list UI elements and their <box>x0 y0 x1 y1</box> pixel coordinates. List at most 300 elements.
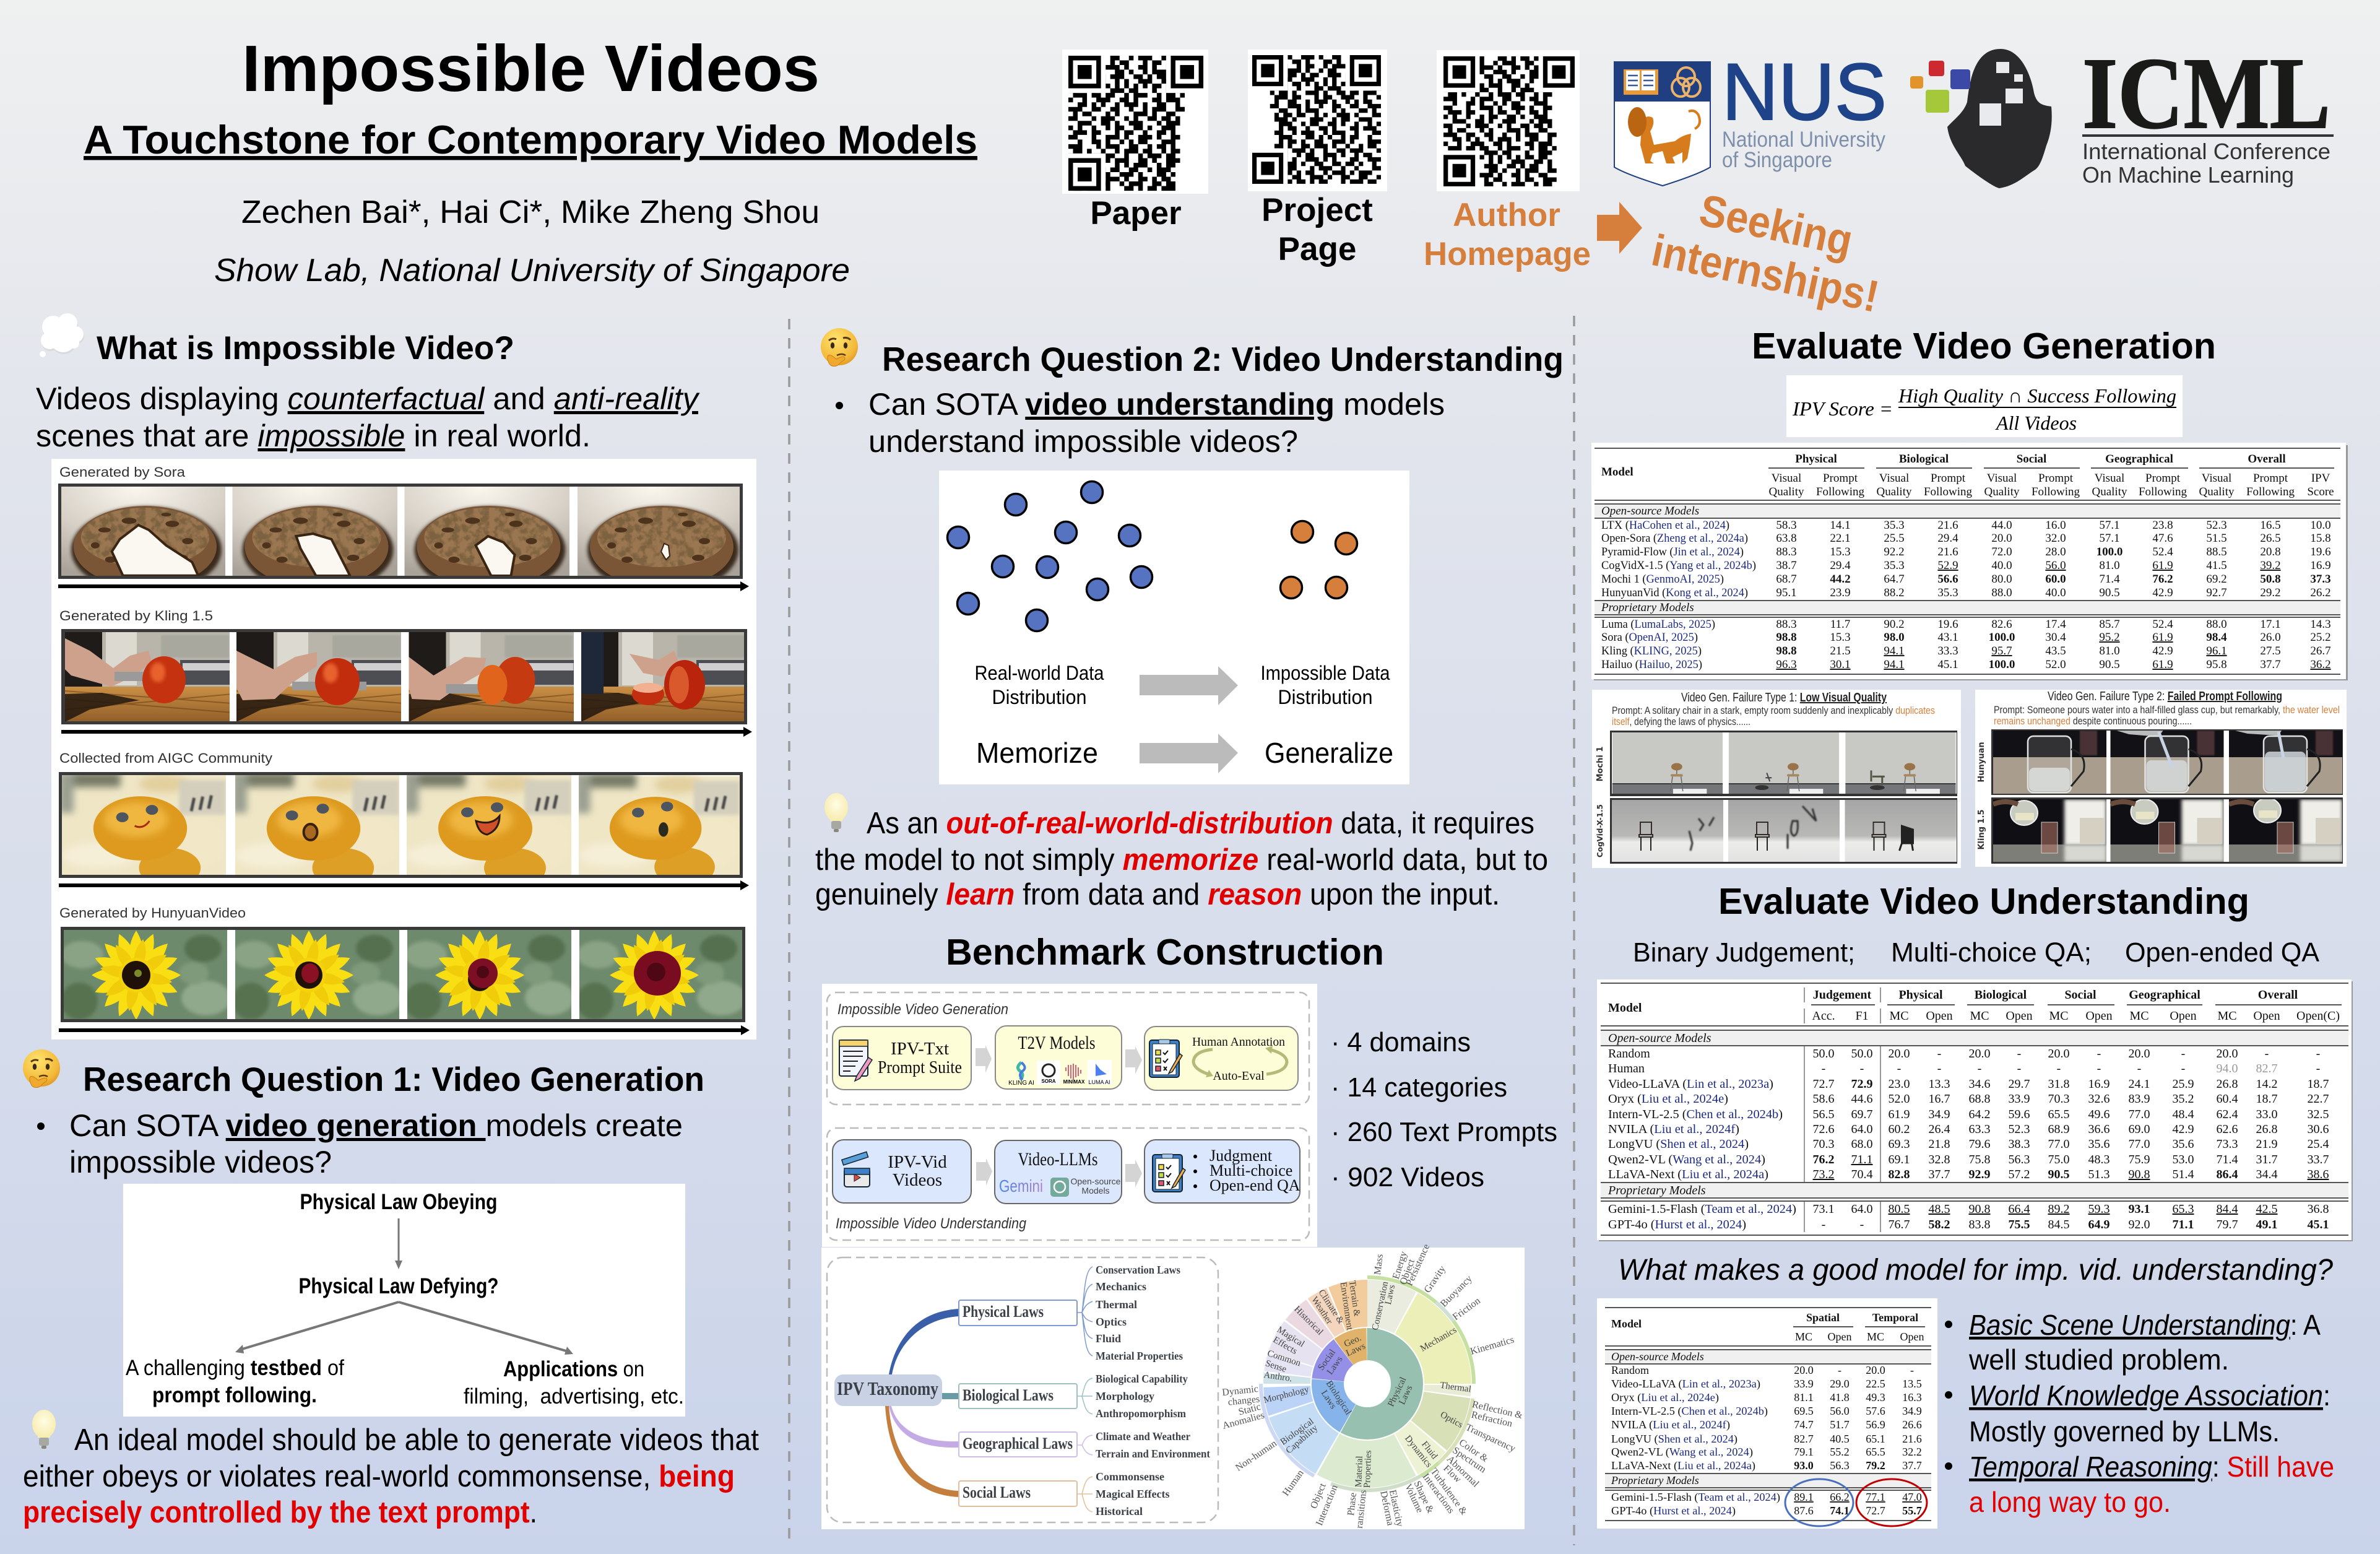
QR code: project page <box>1248 50 1387 191</box>
table header: Following <box>2032 485 2080 498</box>
outer labels: Object <box>1309 1482 1328 1510</box>
branch: social laws <box>959 1470 1169 1517</box>
proprietary rows: 49.1 <box>2256 1218 2278 1231</box>
open-source rows: 38.7 <box>1776 559 1797 572</box>
proprietary rows: Proprietary Models <box>1608 1184 1706 1197</box>
open-source rows: 62.4 <box>2216 1108 2238 1121</box>
frames: CogVid-X chair <box>1610 798 1957 864</box>
open-source rows: 26.2 <box>2310 586 2331 599</box>
domain / category statistics: · 260 Text Prompts <box>1331 1117 1557 1147</box>
RQ2 insight text: genuinely learn from data and reason upon the input. <box>815 878 1500 911</box>
outer labels: Spectrum <box>1450 1445 1488 1475</box>
outer labels: Friction <box>1451 1296 1482 1322</box>
open-source rows: 20.0 <box>1968 1047 1991 1061</box>
arrow <box>1125 1160 1142 1187</box>
outer labels: Static <box>1237 1402 1262 1418</box>
open-source rows: 39.2 <box>2260 559 2281 572</box>
panel: failure type 2 failed prompt following: Kling 1.5 <box>1977 809 1986 850</box>
open-source rows: 16.9 <box>2088 1077 2110 1091</box>
logo: ICML head <box>1910 49 2052 188</box>
proprietary rows: 45.1 <box>2308 1218 2329 1231</box>
open-source rows: Mochi 1 (GenmoAI, 2025) <box>1601 573 1724 586</box>
panel: memorize vs generalize diagram: Distribution <box>1278 686 1373 708</box>
table header: Visual <box>1879 472 1909 485</box>
proprietary rows <box>1608 1184 2329 1231</box>
step: T2V models: MINIMAX <box>1063 1079 1085 1085</box>
table rules <box>1595 448 2340 674</box>
proprietary rows: 95.8 <box>2206 658 2227 671</box>
proprietary rows: 15.3 <box>1830 631 1851 644</box>
label: author homepage: Homepage <box>1424 236 1591 272</box>
category labels: Weather <box>1309 1295 1335 1326</box>
open-source rows: LLaVA-Next (Liu et al., 2024a) <box>1608 1168 1768 1181</box>
open-source rows: 58.6 <box>1812 1092 1835 1106</box>
open-source rows: Qwen2-VL (Wang et al., 2024) <box>1608 1153 1765 1166</box>
open-source rows <box>1608 1031 2329 1181</box>
step: IPV-Txt prompt suite <box>833 1027 971 1090</box>
step: judgment, multi-choice, open-end QA: Judgment <box>1209 1147 1273 1165</box>
open-source rows: 68.8 <box>1968 1092 1991 1106</box>
label: author homepage <box>1424 197 1591 272</box>
panel: memorize vs generalize diagram: Real-world Data <box>974 662 1104 684</box>
proprietary rows: 92.0 <box>2128 1218 2150 1231</box>
takeaways list: World Knowledge Association: <box>1969 1379 2330 1412</box>
proprietary rows: 73.1 <box>1812 1202 1835 1216</box>
logo: NUS crest <box>1614 62 1710 186</box>
table rows: Proprietary Models <box>1611 1474 1699 1487</box>
table header <box>1611 1311 1924 1343</box>
open-source rows: 59.6 <box>2008 1108 2030 1121</box>
open-source rows: 23.8 <box>2152 519 2173 532</box>
category labels: Laws <box>1397 1384 1415 1406</box>
proprietary rows: 96.3 <box>1776 658 1797 671</box>
proprietary rows: 61.9 <box>2152 658 2173 671</box>
table header: Biological <box>1975 988 2027 1002</box>
open-source rows: 21.6 <box>1937 545 1958 558</box>
table rows: 56.3 <box>1830 1459 1850 1472</box>
open-source rows: 35.2 <box>2173 1092 2194 1106</box>
outer labels: Energy <box>1391 1250 1409 1280</box>
open-source rows: 15.8 <box>2310 532 2331 545</box>
open-source rows: 37.3 <box>2310 573 2331 586</box>
table header: Open <box>2170 1009 2197 1023</box>
proprietary rows: 80.5 <box>1888 1202 1910 1216</box>
table rows: 40.5 <box>1830 1433 1850 1445</box>
table header: Prompt <box>1823 472 1858 485</box>
open-source rows: 50.0 <box>1851 1047 1873 1061</box>
open-source rows: 69.0 <box>2128 1122 2150 1136</box>
panel: physical law decision diagram: filming, advertising, etc. <box>464 1384 684 1409</box>
proprietary rows: 61.9 <box>2152 631 2173 644</box>
branch: geographical laws: Climate and Weather <box>1096 1430 1190 1443</box>
open-source rows: 20.0 <box>2216 1047 2238 1061</box>
table header: MC <box>1795 1330 1812 1343</box>
open-source rows: 16.7 <box>1929 1092 1950 1106</box>
open-source rows: 52.0 <box>1888 1092 1910 1106</box>
open-source rows: 92.9 <box>1968 1168 1991 1181</box>
table header: MC <box>1889 1009 1909 1023</box>
open-source rows: 26.5 <box>2260 532 2281 545</box>
branch: social laws: Historical <box>1096 1505 1143 1517</box>
proprietary rows: 89.2 <box>2048 1202 2070 1216</box>
open-source rows: 28.0 <box>2045 545 2066 558</box>
open-source rows: 19.6 <box>2310 545 2331 558</box>
open-source rows: 71.4 <box>2216 1153 2238 1166</box>
proprietary rows: - <box>1822 1218 1825 1231</box>
table header: Model <box>1611 1317 1642 1330</box>
outer labels: Refraction <box>1470 1410 1513 1429</box>
open-source rows: 94.0 <box>2216 1062 2238 1075</box>
open-source rows: 35.6 <box>2088 1137 2110 1151</box>
open-source rows: 35.3 <box>1884 559 1905 572</box>
table header: Quality <box>1769 485 1804 498</box>
step: T2V models: T2V Models <box>1018 1033 1096 1053</box>
open-source rows: LTX (HaCohen et al., 2024) <box>1601 519 1729 532</box>
proprietary rows: 66.4 <box>2008 1202 2030 1216</box>
table rows: Intern-VL-2.5 (Chen et al., 2024b) <box>1611 1405 1768 1418</box>
panel: benchmark pipelines: Impossible Video Understanding <box>836 1215 1027 1232</box>
table header: Quality <box>2199 485 2235 498</box>
category labels: Morphology <box>1263 1384 1310 1405</box>
open-source rows: 51.5 <box>2206 532 2227 545</box>
open-source rows: 68.7 <box>1776 573 1797 586</box>
RQ1 question bullet <box>37 1108 683 1179</box>
step: annotation and auto-eval <box>1145 1027 1298 1090</box>
proprietary rows: 90.8 <box>1968 1202 1991 1216</box>
open-source rows: - <box>2265 1047 2269 1061</box>
open-source rows: 68.9 <box>2048 1122 2070 1136</box>
open-source rows: - <box>2017 1047 2021 1061</box>
open-source rows: 72.7 <box>1812 1077 1835 1091</box>
proprietary rows <box>1601 601 2331 671</box>
table rows: 66.2 <box>1830 1491 1850 1503</box>
RQ2 insight text: As an out-of-real-world-distribution data, it requires <box>867 807 1534 840</box>
open-source rows: 76.2 <box>2152 573 2173 586</box>
open-source rows: 18.7 <box>2256 1092 2278 1106</box>
table rows: GPT-4o (Hurst et al., 2024) <box>1611 1504 1736 1517</box>
open-source rows: 88.2 <box>1884 586 1905 599</box>
RQ2 question bullet: understand impossible videos? <box>868 424 1298 459</box>
panel: failure type 1 low visual quality: Mochi 1 <box>1596 747 1605 781</box>
open-source rows: 60.0 <box>2045 573 2066 586</box>
open-source rows: 75.9 <box>2128 1153 2150 1166</box>
table rows: 72.7 <box>1866 1504 1885 1517</box>
open-source rows: - <box>2097 1047 2101 1061</box>
definition text: Videos displaying counterfactual and anti-reality <box>36 381 700 416</box>
logo text: ICML: International Conference <box>2082 139 2330 164</box>
open-source rows: - <box>1937 1062 1941 1075</box>
category labels: Fluid <box>1419 1439 1440 1461</box>
proprietary rows: 95.2 <box>2099 631 2120 644</box>
open-source rows: 60.4 <box>2216 1092 2238 1106</box>
proprietary rows: 83.8 <box>1968 1218 1991 1231</box>
outer labels: ransitions <box>1354 1490 1369 1529</box>
table rows: NVILA (Liu et al., 2024f) <box>1611 1418 1730 1431</box>
open-source rows: HunyuanVid (Kong et al., 2024) <box>1601 586 1748 599</box>
open-source rows: 24.1 <box>2128 1077 2150 1091</box>
outer labels: Flow <box>1441 1463 1463 1485</box>
logo text: ICML: On Machine Learning <box>2082 162 2294 188</box>
category labels: Terrain & <box>1347 1280 1362 1317</box>
table header: Overall <box>2258 988 2298 1002</box>
open-source rows: 64.0 <box>1851 1122 1873 1136</box>
open-source rows: - <box>2316 1062 2320 1075</box>
panel: physical law decision diagram: A challenging testbed of <box>126 1356 344 1380</box>
arrow <box>976 1158 992 1186</box>
formula: IPV score: All Videos <box>1995 412 2077 434</box>
proprietary rows: 71.1 <box>2173 1218 2194 1231</box>
branch: physical laws <box>959 1264 1183 1362</box>
table rows: Open-source Models <box>1611 1350 1704 1363</box>
heading: research question 1: Research Question 1: Video Generation <box>83 1060 704 1098</box>
root node <box>834 1374 942 1406</box>
table rows: 65.1 <box>1866 1433 1885 1445</box>
open-source rows: Video-LLaVA (Lin et al., 2023a) <box>1608 1077 1773 1091</box>
open-source rows: 58.3 <box>1776 519 1797 532</box>
heading: evaluate video generation: Evaluate Video Generation <box>1752 326 2216 367</box>
panel: physical law decision diagram: prompt following. <box>152 1383 317 1407</box>
table: spatial vs temporal results <box>1597 1298 1937 1529</box>
open-source rows: 72.6 <box>1812 1122 1835 1136</box>
open-source rows: 86.4 <box>2216 1168 2238 1181</box>
proprietary rows: 81.0 <box>2099 645 2120 658</box>
category labels: Capability <box>1284 1423 1320 1456</box>
proprietary rows: 98.8 <box>1776 631 1797 644</box>
open-source rows: 22.7 <box>2308 1092 2329 1106</box>
table header: Prompt <box>2145 472 2181 485</box>
open-source rows: 82.7 <box>2256 1062 2278 1075</box>
open-source rows: 48.3 <box>2088 1153 2110 1166</box>
open-source rows: 34.9 <box>1929 1108 1950 1121</box>
open-source rows: 77.0 <box>2048 1137 2070 1151</box>
proprietary rows: 43.1 <box>1937 631 1958 644</box>
panel: failure type 2 failed prompt following: remains unchanged despite continuous pouring...... <box>1994 715 2192 727</box>
branch: geographical laws <box>959 1430 1210 1460</box>
open-source rows: 52.9 <box>1937 559 1958 572</box>
table header: Model <box>1601 466 1634 479</box>
open-source rows: 21.9 <box>2256 1137 2278 1151</box>
proprietary rows: 75.5 <box>2008 1218 2030 1231</box>
impossible data points <box>1280 521 1357 598</box>
branch: biological laws <box>959 1373 1188 1420</box>
table rows: 29.0 <box>1830 1378 1850 1390</box>
open-source rows: 26.8 <box>2256 1122 2278 1136</box>
table header: F1 <box>1855 1009 1869 1023</box>
proprietary rows: 42.5 <box>2256 1202 2278 1216</box>
table rows: 74.1 <box>1830 1504 1850 1517</box>
proprietary rows: Sora (OpenAI, 2025) <box>1601 631 1698 644</box>
category labels: Conservation <box>1370 1280 1390 1331</box>
open-source rows: 88.3 <box>1776 545 1797 558</box>
title: Impossible Videos <box>242 32 820 105</box>
table header: MC <box>1867 1330 1884 1343</box>
outer labels: Color & <box>1457 1437 1491 1464</box>
open-source rows: Open-source Models <box>1601 505 1699 518</box>
open-source rows <box>1601 505 2331 599</box>
table rows: 56.9 <box>1866 1418 1885 1431</box>
table rows: Oryx (Liu et al., 2024e) <box>1611 1391 1719 1404</box>
step: T2V models: LUMA AI <box>1088 1079 1110 1085</box>
category labels: Magical <box>1275 1325 1306 1349</box>
open-source rows: Pyramid-Flow (Jin et al., 2024) <box>1601 545 1744 558</box>
table rows: 32.2 <box>1902 1446 1922 1458</box>
open-source rows: 56.3 <box>2008 1153 2030 1166</box>
branch: social laws: Social Laws <box>963 1483 1031 1501</box>
table rules <box>1605 1308 1931 1521</box>
open-source rows: 20.0 <box>2128 1047 2150 1061</box>
step: IPV-Vid videos: Videos <box>893 1170 942 1190</box>
proprietary rows: 94.1 <box>1884 658 1905 671</box>
proprietary rows: 88.0 <box>2206 618 2227 631</box>
proprietary rows: 100.0 <box>1989 631 2015 644</box>
open-source rows: 35.3 <box>1937 586 1958 599</box>
proprietary rows: 85.7 <box>2099 618 2120 631</box>
proprietary rows: 84.5 <box>2048 1218 2070 1231</box>
callout: seeking internships: internships! <box>1648 225 1883 322</box>
outer labels: Turbulence & <box>1429 1466 1469 1517</box>
takeaways list: Mostly governed by LLMs. <box>1969 1415 2280 1448</box>
category labels: Biological <box>1279 1417 1316 1448</box>
table header: Physical <box>1898 988 1943 1002</box>
proprietary rows: 76.7 <box>1888 1218 1910 1231</box>
outer labels: Phase <box>1346 1492 1359 1516</box>
table header: Temporal <box>1872 1311 1918 1324</box>
open-source rows: 72.0 <box>1991 545 2012 558</box>
RQ2 question bullet <box>836 387 1445 459</box>
open-source rows: 60.2 <box>1888 1122 1910 1136</box>
open-source rows: 57.2 <box>2008 1168 2030 1181</box>
panel: benchmark pipelines: Impossible Video Generation <box>837 1001 1008 1018</box>
open-source rows: NVILA (Liu et al., 2024f) <box>1608 1122 1739 1136</box>
table rows: 74.7 <box>1794 1418 1814 1431</box>
open-source rows: 62.6 <box>2216 1122 2238 1136</box>
open-source rows: 88.0 <box>1991 586 2012 599</box>
understanding task types <box>1633 937 2320 968</box>
proprietary rows: 90.2 <box>1884 618 1905 631</box>
logo text: NUS: National University <box>1722 128 1885 152</box>
open-source rows: 61.9 <box>1888 1108 1910 1121</box>
proprietary rows: 52.0 <box>2045 658 2066 671</box>
proprietary rows: 36.8 <box>2308 1202 2329 1216</box>
open-source rows: 52.3 <box>2206 519 2227 532</box>
open-source rows: 71.1 <box>1851 1153 1873 1166</box>
open-source rows: - <box>2137 1062 2141 1075</box>
category labels: Thermal <box>1439 1381 1472 1394</box>
branch: physical laws: Optics <box>1096 1316 1127 1328</box>
chart: taxonomy sunburst <box>1217 1233 1524 1534</box>
open-source rows: 33.7 <box>2308 1153 2329 1166</box>
table header <box>1601 453 2334 498</box>
outer labels: Interaction <box>1314 1483 1340 1527</box>
logo text: ICML: ICML <box>2082 37 2330 150</box>
table header: Spatial <box>1806 1311 1840 1324</box>
table header: Model <box>1608 1001 1642 1015</box>
table rows: Random <box>1611 1364 1649 1376</box>
table header: Visual <box>2095 472 2124 485</box>
table: video understanding results <box>1597 979 2353 1241</box>
open-source rows: 71.4 <box>2099 573 2120 586</box>
table rows: Video-LLaVA (Lin et al., 2023a) <box>1611 1378 1760 1391</box>
open-source rows: 32.8 <box>1929 1153 1950 1166</box>
proprietary rows: 52.4 <box>2152 618 2173 631</box>
table rows: 51.7 <box>1830 1418 1850 1431</box>
panel: memorize vs generalize diagram: Distribution <box>992 686 1087 708</box>
proprietary rows: 48.5 <box>1929 1202 1950 1216</box>
table header: Social <box>2017 453 2046 466</box>
open-source rows: Open-Sora (Zheng et al., 2024a) <box>1601 532 1748 545</box>
column divider left <box>788 319 790 1545</box>
panel: physical law decision diagram: Physical Law Defying? <box>298 1274 499 1298</box>
open-source rows: 53.0 <box>2173 1153 2194 1166</box>
open-source rows: 40.0 <box>1991 559 2012 572</box>
table header: Overall <box>2248 453 2286 466</box>
open-source rows: 51.4 <box>2173 1168 2194 1181</box>
open-source rows: 29.2 <box>2260 586 2281 599</box>
proprietary rows: 26.7 <box>2310 645 2331 658</box>
example row: Kling tomato <box>59 608 752 737</box>
outer ring: subcategories <box>1217 1233 1518 1534</box>
table rows: 65.5 <box>1866 1446 1885 1458</box>
open-source rows: 29.7 <box>2008 1077 2030 1091</box>
open-source rows: 88.5 <box>2206 545 2227 558</box>
outer labels: changes <box>1227 1394 1260 1408</box>
proprietary rows: 27.5 <box>2260 645 2281 658</box>
example row: AIGC community egg: Collected from AIGC Community <box>59 750 272 766</box>
example row: Kling tomato: Generated by Kling 1.5 <box>59 608 213 623</box>
RQ1 insight text: precisely controlled by the text prompt. <box>23 1496 537 1529</box>
frames: Hunyuan water glass <box>1991 729 2343 795</box>
domain / category statistics: · 14 categories <box>1331 1072 1507 1103</box>
table header: Following <box>1816 485 1865 498</box>
example row: Hunyuan sunflower: Generated by HunyuanVideo <box>59 905 246 921</box>
category labels: Effects <box>1271 1335 1299 1356</box>
category labels: Mechanics <box>1419 1325 1458 1354</box>
proprietary rows: 90.5 <box>2099 658 2120 671</box>
open-source rows: Open-source Models <box>1608 1031 1711 1045</box>
outer labels: Gravity <box>1422 1264 1448 1295</box>
open-source rows: 29.4 <box>1937 532 1958 545</box>
open-source rows: 47.6 <box>2152 532 2173 545</box>
icon: thinking face RQ2 <box>821 328 858 367</box>
step: video LLMs: Gemini <box>999 1176 1043 1196</box>
open-source rows: 48.4 <box>2173 1108 2194 1121</box>
step: annotation and auto-eval: Auto-Eval <box>1213 1069 1265 1083</box>
open-source rows: 33.9 <box>2008 1092 2030 1106</box>
open-source rows: 25.4 <box>2308 1137 2329 1151</box>
category labels: Sense <box>1264 1358 1288 1374</box>
open-source rows: - <box>1897 1062 1901 1075</box>
branch: physical laws: Fluid <box>1096 1332 1121 1345</box>
RQ1 question bullet: impossible videos? <box>69 1145 332 1179</box>
example row: Hunyuan sunflower <box>59 905 750 1035</box>
open-source rows: Human <box>1608 1062 1645 1075</box>
callout: spatial circle <box>1785 1479 1853 1526</box>
open-source rows: 22.1 <box>1830 532 1851 545</box>
open-source rows: 35.3 <box>1884 519 1905 532</box>
table rows: 79.1 <box>1794 1446 1814 1458</box>
open-source rows: - <box>1978 1062 1981 1075</box>
table header: Prompt <box>2038 472 2074 485</box>
label: project page: Page <box>1278 231 1356 267</box>
table header: Open <box>1900 1330 1924 1343</box>
table header: Visual <box>1772 472 1801 485</box>
open-source rows: 57.1 <box>2099 532 2120 545</box>
category labels: Laws <box>1383 1283 1397 1306</box>
open-source rows: 32.5 <box>2308 1108 2329 1121</box>
open-source rows: 56.5 <box>1812 1108 1835 1121</box>
table rows: 47.0 <box>1902 1491 1922 1503</box>
category labels: Properties <box>1362 1450 1374 1488</box>
